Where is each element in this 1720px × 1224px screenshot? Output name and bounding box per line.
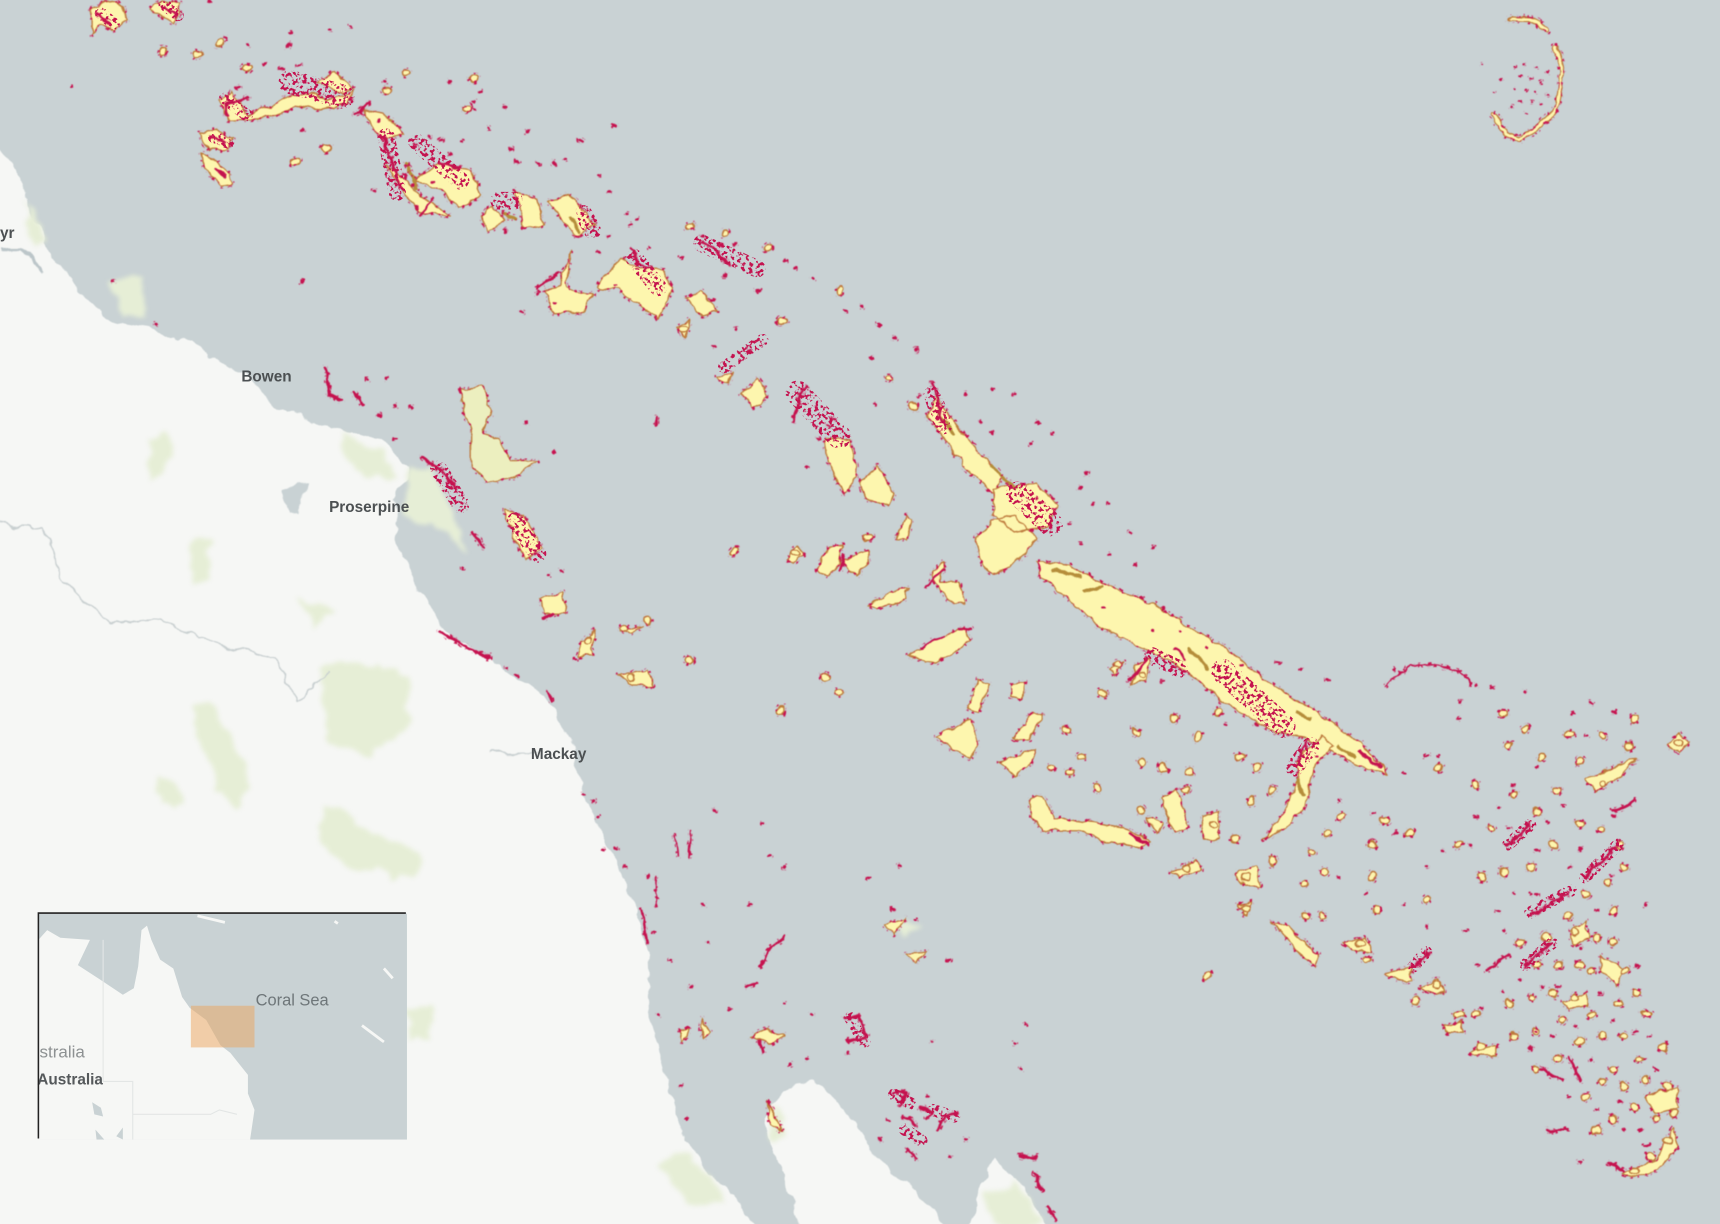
inset locator map (37, 913, 407, 1140)
inset frame (38, 913, 406, 1138)
reefs: southern shelf islands (936, 680, 1497, 1055)
reefs: Whitsunday islands group (326, 367, 626, 866)
reef atoll: outlying north-east atoll (1481, 19, 1563, 139)
place label: Proserpine: Proserpine (329, 499, 410, 516)
inset Australia land (38, 926, 254, 1140)
reefs: outer barrier chain (927, 384, 1388, 839)
reefs: southern inshore red reefs (592, 801, 1055, 1220)
inset study area rectangle (191, 1006, 254, 1047)
lake (283, 483, 307, 518)
reefs: Swain reefs south-eastern field (1338, 665, 1689, 1178)
place label: Ayr (cropped): yr (0, 225, 15, 242)
southern peninsula land (763, 1080, 976, 1224)
reefs: northern cluster (71, 0, 648, 324)
south-east coastal land (954, 1157, 1070, 1224)
place label: Bowen: Bowen (241, 369, 292, 386)
land masses (0, 126, 1070, 1224)
rivers and boundaries (0, 250, 535, 752)
inset label: Australia (bold): Australia (37, 1072, 103, 1089)
place label: Mackay: Mackay (531, 746, 587, 763)
Queensland mainland (0, 126, 790, 1224)
inset sea (38, 914, 407, 1140)
inset islands (197, 916, 393, 1042)
inset lakes (92, 1102, 123, 1140)
inset boundaries (103, 940, 237, 1140)
inset label: Australia (light): stralia (39, 1042, 85, 1061)
inset label: Coral Sea: Coral Sea (256, 992, 330, 1010)
reefs: middle shelf (521, 225, 1153, 685)
vegetation patches (24, 197, 1042, 1224)
